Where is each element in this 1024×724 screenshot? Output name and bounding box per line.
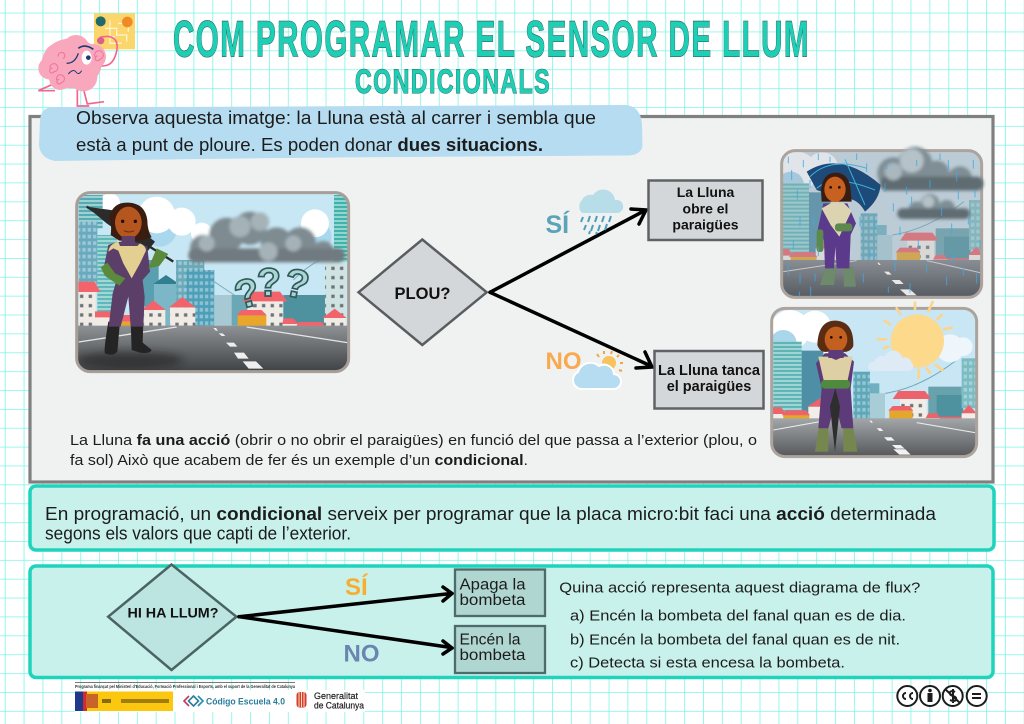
- label: si: SÍ: [546, 210, 570, 239]
- icon: yellow maze note: [94, 13, 135, 49]
- arrow: no: [490, 292, 652, 368]
- image: Lluna with open umbrella in rain: [777, 147, 984, 297]
- text: explanation: fa sol) Això que acabem de fer és un exemple d’un condicional .: [70, 453, 528, 469]
- panel: definition of conditional: segons els valors que capti de l’exterior.: [45, 524, 351, 544]
- flowchart: plou: [358, 180, 764, 408]
- icon: sun and cloud: [868, 302, 952, 378]
- box: closes umbrella: [654, 351, 764, 408]
- label: no: NO: [344, 640, 380, 668]
- box: opens umbrella: [648, 180, 762, 240]
- icon: sun behind cloud: [573, 351, 623, 389]
- text: question: [559, 580, 920, 671]
- label: si: SÍ: [345, 573, 369, 601]
- footer: funding logos: [75, 682, 365, 712]
- icon: rain cloud: [579, 189, 623, 234]
- logo: codigo escuela: [184, 696, 285, 708]
- box: opens umbrella: obre el: [683, 200, 728, 216]
- box: turn off bulb: [455, 570, 545, 616]
- text: question: c) Detecta si esta encesa la bombeta.: [570, 655, 845, 671]
- diamond: hi ha llum: [108, 564, 236, 670]
- panel: definition of conditional: [30, 486, 994, 550]
- box: closes umbrella: el paraigües: [667, 379, 751, 395]
- image: Lluna with closed umbrella in sun: [770, 302, 977, 457]
- box: closes umbrella: La Lluna tanca: [658, 363, 761, 379]
- box: turn on bulb: bombeta: [460, 647, 526, 664]
- character: Lluna under umbrella: [807, 159, 881, 287]
- icon: question marks: [230, 260, 313, 318]
- diamond: plou: [358, 240, 487, 345]
- panel: definition of conditional: En programació, un condicional serveix per programar que la placa micro:bit faci una acció determinada: [45, 504, 937, 524]
- box: turn on bulb: [455, 626, 545, 673]
- box: turn on bulb: Encén la: [460, 631, 521, 648]
- logo: codigo escuela: Código Escuela 4.0: [206, 696, 285, 708]
- panel: exercise: [30, 564, 993, 678]
- logo: generalitat: [296, 691, 365, 712]
- icon: creative commons badges: [897, 686, 987, 706]
- text: question: a) Encén la bombeta del fanal quan es de dia.: [570, 609, 906, 625]
- logo: generalitat: de Catalunya: [314, 700, 365, 712]
- arrow: yes: [239, 587, 452, 617]
- clouds: [877, 147, 983, 219]
- arrow: yes: [490, 209, 646, 292]
- callout: intro text: està a punt de ploure. Es poden donar dues situacions.: [76, 135, 543, 155]
- diamond: hi ha llum: HI HA LLUM?: [128, 604, 218, 620]
- rain: [788, 153, 980, 297]
- box: opens umbrella: La Lluna: [677, 184, 734, 200]
- box: turn off bulb: Apaga la: [460, 576, 526, 593]
- diamond: plou: PLOU?: [395, 285, 450, 303]
- arrow: no: [239, 617, 452, 654]
- icon: question marks: ?: [230, 270, 265, 318]
- icon: question marks: ?: [257, 261, 281, 305]
- logo: generalitat: Generalitat: [314, 691, 358, 702]
- text: question: b) Encén la bombeta del fanal quan es de nit.: [570, 632, 900, 648]
- subtitle: CONDICIONALS: [355, 63, 551, 101]
- logo: ministry: [75, 692, 173, 711]
- character: Lluna standing: [815, 321, 857, 452]
- text: explanation: [70, 433, 757, 469]
- character: Lluna with closed umbrella: [87, 203, 173, 355]
- panel: situation example: [30, 105, 993, 482]
- box: turn off bulb: bombeta: [460, 592, 526, 609]
- text: question: Quina acció representa aquest diagrama de flux?: [559, 580, 920, 596]
- text: explanation: La Lluna fa una acció (obrir o no obrir el paraigües) en funció del que passa a l’exterior (plou, o: [70, 433, 757, 449]
- callout: intro text: [39, 105, 642, 161]
- icon: question marks: ?: [280, 260, 313, 308]
- box: opens umbrella: paraigües: [672, 216, 739, 232]
- image: Lluna on street with question marks: [77, 193, 349, 372]
- label: no: NO: [546, 348, 582, 375]
- footer: funding logos: Programa finançat pel Ministeri d'Educació, Formació Professional i Esports, amb el suport de la Generalitat de Catalunya: [75, 684, 295, 689]
- callout: intro text: Observa aquesta imatge: la Lluna està al carrer i sembla que: [76, 108, 596, 128]
- cloud: [188, 212, 345, 262]
- icon: thinking brain character: [38, 13, 135, 106]
